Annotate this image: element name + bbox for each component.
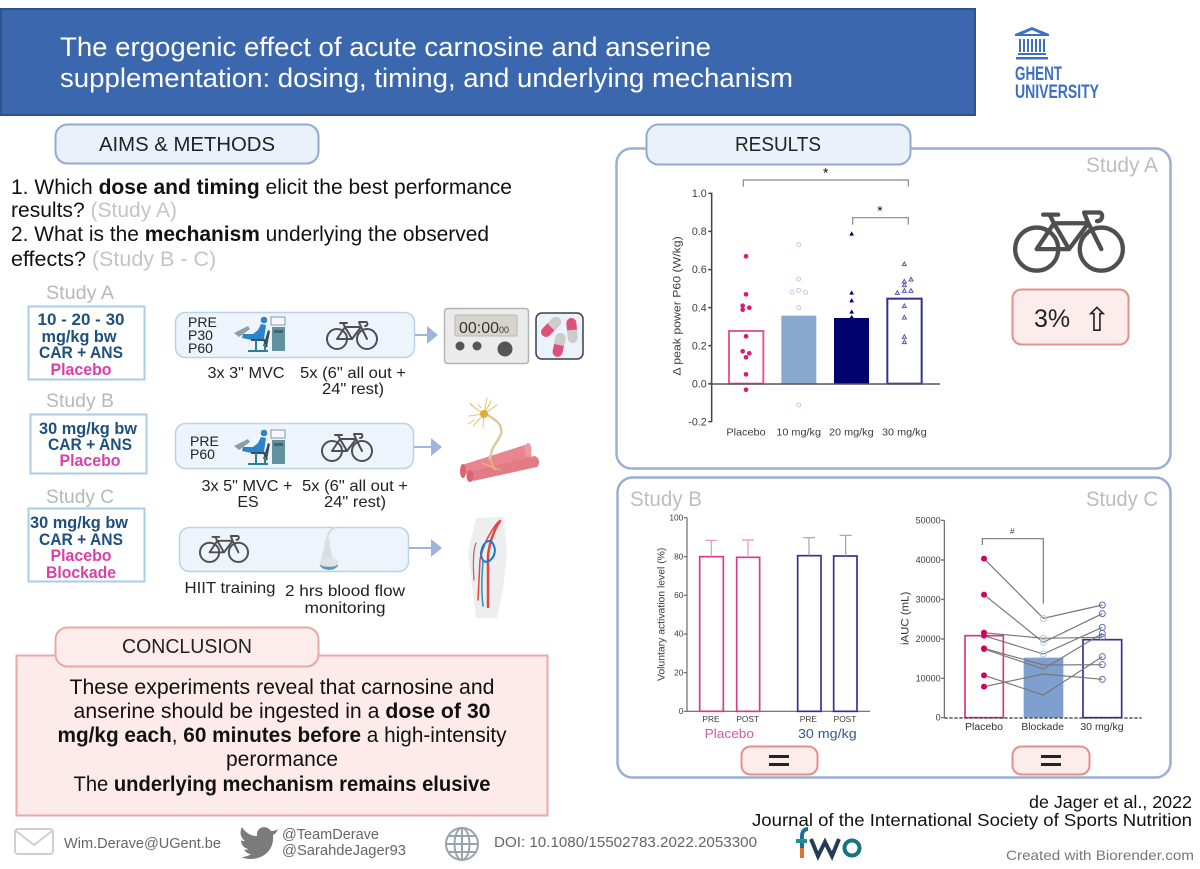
conclusion text [58, 676, 507, 796]
study B design card [30, 391, 146, 474]
bar chart: voluntary activation: 80 [674, 551, 684, 561]
icon: capsules [536, 313, 583, 359]
protocol labels: study B: ES [237, 494, 259, 511]
heading: results: RESULTS [735, 134, 821, 156]
bar chart: peak power: -0.2 [688, 416, 707, 428]
logo: Ghent University [1015, 27, 1099, 103]
protocol labels: study C: 2 hrs blood flow [285, 583, 405, 600]
icon: globe [446, 828, 478, 860]
bar chart: peak power: Δ peak power P60 (W/kg) [672, 236, 684, 376]
chart: iAUC blood flow: 20000 [916, 634, 941, 644]
protocol labels: study B [202, 478, 408, 511]
contact: twitter handles: @SarahdeJager93 [282, 842, 406, 859]
title banner: supplementation: dosing, timing, and underlying mechanism [60, 63, 793, 93]
study C design card: 30 mg/kg bw [30, 514, 128, 532]
protocol panel: study B [176, 424, 414, 468]
callout: study C no difference [1012, 746, 1090, 774]
icon: timer [444, 308, 528, 364]
contact: twitter handles [282, 826, 406, 859]
study C design card: CAR + ANS [39, 531, 123, 549]
conclusion text: The underlying mechanism remains elusive [74, 773, 490, 796]
protocol labels: study C [184, 580, 405, 617]
study A design card: Study A [46, 283, 114, 304]
citation: Journal of the International Society of Sports Nutrition [752, 810, 1192, 830]
bar chart: voluntary activation: 20 [674, 667, 684, 677]
conclusion text: mg/kg each, 60 minutes before a high-intensity [58, 724, 507, 747]
bar chart: peak power: 1.0 [692, 188, 707, 200]
panel: results study A: Study A [1086, 154, 1158, 177]
conclusion text: These experiments reveal that carnosine and [70, 676, 494, 699]
heading: conclusion: CONCLUSION [122, 636, 252, 658]
bar chart: voluntary activation: Voluntary activation level (%) [657, 548, 668, 681]
callout: 3 percent increase: ⇧ [1083, 300, 1111, 339]
text block: research questions [11, 175, 512, 271]
logo: FWO [796, 829, 860, 858]
study C design card: Blockade [46, 564, 116, 582]
bar chart: voluntary activation [657, 512, 870, 741]
icon: timer: 00 [499, 325, 509, 335]
protocol panel: study A: P30 [188, 327, 213, 343]
protocol labels: study A: 5x (6" all out + [300, 365, 406, 382]
text block: research questions: effects? (Study B - C) [11, 247, 216, 271]
bar chart: peak power: 10 mg/kg [776, 428, 821, 439]
chart: iAUC blood flow: Placebo [965, 722, 1003, 733]
chart: iAUC blood flow: # [1010, 526, 1015, 536]
protocol labels: study A: 3x 3" MVC [208, 365, 284, 382]
bar chart: peak power: 0.6 [692, 264, 707, 276]
protocol panel: study A: P60 [188, 340, 213, 356]
contact: email: Wim.Derave@UGent.be [64, 835, 221, 852]
chart: iAUC blood flow: 40000 [916, 555, 941, 565]
conclusion text: perormance [226, 748, 338, 771]
study C design card [28, 487, 144, 582]
chart: iAUC blood flow: 50000 [916, 515, 941, 525]
text block: research questions: 2. What is the mechanism underlying the observed [11, 222, 489, 246]
title banner [1, 9, 975, 115]
chart: iAUC blood flow: iAUC (mL) [900, 592, 912, 645]
chart: iAUC blood flow: Blockade [1021, 722, 1064, 733]
bar chart: voluntary activation: PRE [800, 714, 817, 724]
text block: research questions: results? (Study A) [11, 198, 177, 222]
protocol panel: study B: P60 [190, 446, 215, 462]
study B design card: CAR + ANS [48, 436, 132, 454]
bar chart: peak power: * [823, 164, 829, 180]
panel: results study B and C: Study C [1086, 488, 1158, 511]
logo: Ghent University: GHENT [1015, 64, 1062, 85]
heading: results [646, 124, 910, 164]
arrow: study B outcome [414, 438, 442, 456]
panel: results study B and C: Study B [630, 488, 702, 511]
protocol labels: study C: HIIT training [184, 580, 276, 597]
study A design card: mg/kg bw [42, 328, 117, 346]
bar chart: peak power: 30 mg/kg [882, 428, 927, 439]
protocol panel: study B: PRE [190, 433, 219, 449]
panel: conclusion [16, 628, 548, 816]
chart: iAUC blood flow: 30 mg/kg [1080, 722, 1124, 733]
bar chart: peak power: * [877, 202, 883, 218]
protocol labels: study C: monitoring [304, 600, 386, 617]
credit: BioRender: Created with Biorender.com [1006, 847, 1194, 863]
study A design card: 10 - 20 - 30 [38, 311, 124, 329]
protocol labels: study A [208, 365, 406, 398]
study B design card: 30 mg/kg bw [39, 420, 137, 438]
bar chart: voluntary activation: PRE [702, 714, 720, 724]
bar chart: voluntary activation: POST [736, 714, 759, 724]
protocol panel: study A [176, 312, 414, 358]
protocol labels: study A: 24" rest) [322, 381, 384, 398]
logo: Ghent University: UNIVERSITY [1015, 82, 1099, 103]
study B design card: Study B [46, 391, 114, 412]
bar chart: voluntary activation: 30 mg/kg [798, 726, 857, 741]
study B design card: Placebo [60, 452, 120, 470]
contact: DOI: DOI: 10.1080/15502783.2022.2053300 [494, 834, 757, 851]
citation [752, 792, 1192, 830]
text block: research questions: 1. Which dose and timing elicit the best performance [11, 175, 512, 199]
protocol labels: study B: 3x 5" MVC + [202, 478, 292, 495]
chart: iAUC blood flow: 10000 [916, 673, 941, 683]
bar chart: voluntary activation: 0 [679, 706, 684, 716]
icon: neuron and muscle [460, 398, 539, 482]
protocol panel: study A: PRE [188, 314, 217, 330]
bar chart: voluntary activation: 60 [674, 590, 684, 600]
protocol labels: study B: 5x (6" all out + [302, 478, 408, 495]
bar chart: peak power: 20 mg/kg [829, 428, 874, 439]
bar chart: peak power: 0.4 [692, 302, 707, 314]
citation: de Jager et al., 2022 [1029, 792, 1192, 812]
protocol panel: study C [180, 527, 408, 572]
bar chart: peak power [672, 164, 940, 439]
icon: mail [15, 829, 53, 854]
bar chart: peak power: Placebo [726, 428, 766, 439]
panel: results study A [616, 148, 1170, 468]
study A design card: Placebo [50, 361, 112, 379]
arrow: study A outcome [415, 326, 438, 344]
icon: large bicycle [1015, 212, 1123, 271]
title banner: The ergogenic effect of acute carnosine and anserine [60, 32, 711, 62]
bar chart: voluntary activation: POST [834, 714, 856, 724]
panel: results study B and C [618, 478, 1170, 778]
study C design card: Placebo [50, 547, 112, 565]
heading: conclusion [56, 628, 318, 666]
chart: iAUC blood flow: 30000 [916, 594, 941, 604]
bar chart: peak power: 0.2 [692, 340, 707, 352]
chart: iAUC blood flow: 0 [936, 713, 941, 723]
bar chart: voluntary activation: Placebo [705, 726, 754, 741]
arrow: study C outcome [409, 539, 442, 557]
chart: iAUC blood flow [900, 515, 1142, 733]
heading: aims and methods [56, 124, 318, 164]
callout: 3 percent increase [1012, 290, 1128, 344]
study A design card [28, 283, 144, 380]
contact: twitter handles: @TeamDerave [282, 826, 379, 843]
bar chart: voluntary activation: 40 [674, 629, 684, 639]
study A design card: CAR + ANS [39, 344, 123, 362]
icon: timer: 00:00 [459, 320, 499, 337]
bar chart: voluntary activation: 100 [669, 512, 684, 522]
bar chart: peak power: 0.8 [692, 226, 707, 238]
icon: ultrasound probe [320, 527, 338, 570]
heading: aims and methods: AIMS & METHODS [99, 134, 275, 156]
icon: leg blood vessels [468, 517, 507, 618]
callout: study B no difference [742, 746, 818, 774]
protocol labels: study B: 24" rest) [324, 494, 386, 511]
conclusion text: anserine should be ingested in a dose of 30 [74, 700, 490, 723]
bar chart: peak power: 0.0 [692, 378, 707, 390]
study C design card: Study C [46, 487, 114, 508]
icon: twitter bird [241, 827, 278, 859]
callout: 3 percent increase: 3% [1034, 305, 1070, 333]
